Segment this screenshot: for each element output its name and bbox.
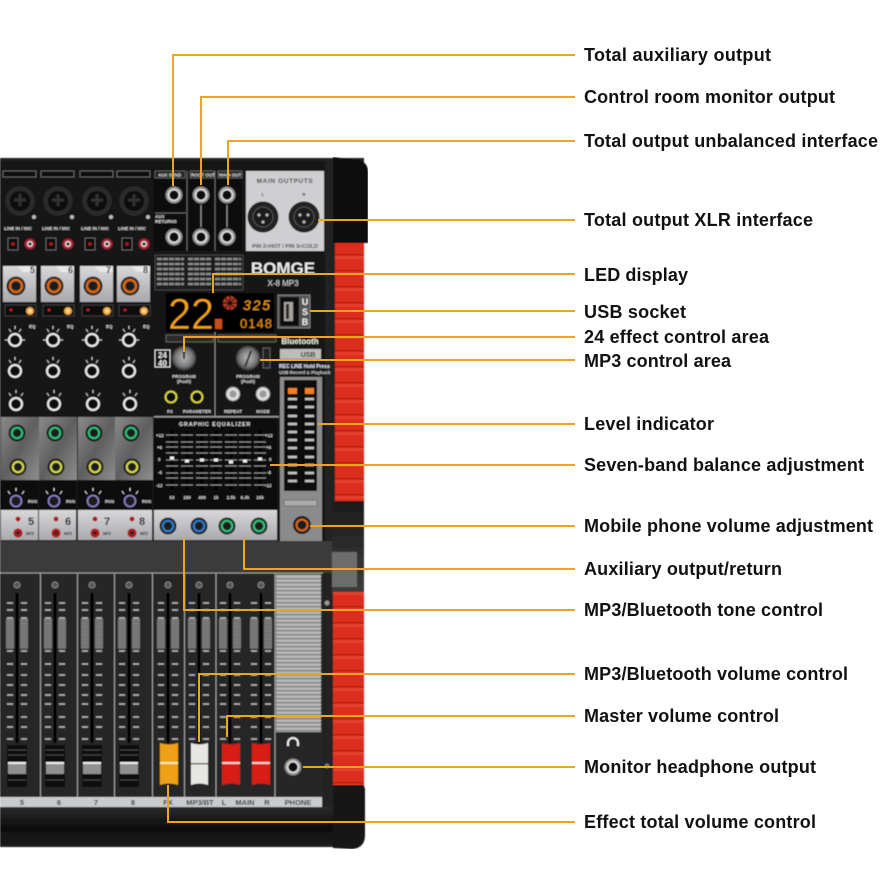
effect control area: PROGRAM xyxy=(172,374,196,379)
label strip: 5 xyxy=(20,798,24,807)
bluetooth and USB labels xyxy=(279,337,331,375)
graphic equalizer: 160 xyxy=(183,495,191,500)
label strip: FX xyxy=(163,798,173,807)
LED display: 22 xyxy=(168,290,214,339)
channel strips xyxy=(1,171,153,540)
bottom front lip xyxy=(0,807,333,847)
brand: X-8 MP3 xyxy=(267,279,299,288)
label: total output unbalanced interface: Total output unbalanced interface xyxy=(584,131,878,151)
graphic equalizer: +12 xyxy=(156,433,164,438)
graphic equalizer: 1k xyxy=(213,495,219,500)
MP3 control area xyxy=(154,335,279,418)
leader lines xyxy=(168,55,575,822)
brand xyxy=(251,259,315,288)
channel text: M/S xyxy=(103,531,111,536)
effect control area: 40 xyxy=(158,359,167,368)
lower band xyxy=(0,541,332,573)
channel text: M/S xyxy=(26,531,34,536)
main L fader cap xyxy=(222,743,240,785)
graphic equalizer: -6 xyxy=(267,470,271,475)
channel text: PAN xyxy=(28,499,37,504)
label strip xyxy=(0,797,322,807)
USB socket xyxy=(278,295,310,328)
graphic equalizer: 16k xyxy=(256,495,264,500)
screws xyxy=(324,600,330,769)
label strip: L xyxy=(222,798,227,807)
channel fader caps xyxy=(7,745,139,787)
LED display xyxy=(166,290,274,339)
tone and aux knobs xyxy=(154,510,277,540)
effects list xyxy=(155,255,243,290)
label strip: 6 xyxy=(57,798,61,807)
channel text: PAN xyxy=(66,499,75,504)
bluetooth and USB labels: USB xyxy=(301,352,315,359)
LED display: 325 xyxy=(243,297,270,313)
channel text xyxy=(4,226,151,536)
FX fader cap xyxy=(160,743,178,785)
label strip: R xyxy=(264,798,270,807)
label strip: 8 xyxy=(131,798,135,807)
main R fader cap xyxy=(252,743,270,785)
channel text: EQ xyxy=(29,324,36,329)
mid cap xyxy=(332,501,364,593)
channel text: 7 xyxy=(106,265,111,275)
graphic equalizer: +12 xyxy=(265,433,273,438)
label: effect total volume control: Effect total volume control xyxy=(584,812,816,832)
effect control area: 24 xyxy=(158,351,167,360)
label: monitor headphone output: Monitor headphone output xyxy=(584,757,816,777)
vent grille xyxy=(276,574,321,732)
label: level indicator: Level indicator xyxy=(584,414,714,434)
graphic equalizer: GRAPHIC EQUALIZER xyxy=(179,422,251,428)
main outputs XLR panel: R xyxy=(302,192,306,197)
output jacks section: AUX SEND xyxy=(158,172,182,178)
label: MP3/Bluetooth volume control: MP3/Bluetooth volume control xyxy=(584,664,848,684)
graphic equalizer: -12 xyxy=(265,483,272,488)
graphic equalizer: 63 xyxy=(169,495,175,500)
graphic equalizer: -6 xyxy=(158,470,162,475)
MP3 control area: REPEAT xyxy=(224,409,242,414)
channel text: LINE IN / MIC xyxy=(118,226,147,231)
output jacks section xyxy=(154,170,242,251)
graphic equalizer: +6 xyxy=(157,445,163,450)
graphic equalizer: 6.3k xyxy=(241,495,250,500)
right silver column with level indicator xyxy=(280,377,322,541)
label: master volume control: Master volume control xyxy=(584,706,779,726)
callout labels xyxy=(584,45,878,832)
bluetooth and USB labels: REC LINE Hold Press xyxy=(279,364,330,370)
label strip: PHONE xyxy=(285,798,311,807)
graphic equalizer xyxy=(154,419,277,509)
MP3 control area: (Push) xyxy=(241,379,256,384)
label: USB socket: USB socket xyxy=(584,302,686,322)
LED display: 0148 xyxy=(240,316,272,331)
graphic equalizer: 0 xyxy=(269,457,272,462)
effect control area: FX xyxy=(167,409,173,414)
main outputs XLR panel: MAIN OUTPUTS xyxy=(257,178,313,185)
label: total output XLR interface: Total output XLR interface xyxy=(584,210,813,230)
top control panel xyxy=(0,161,325,541)
headphone icon xyxy=(288,738,298,746)
label strip: MAIN xyxy=(235,798,255,807)
channel text: M/S xyxy=(64,531,72,536)
channel text: 6 xyxy=(68,265,73,275)
label: MP3/Bluetooth tone control: MP3/Bluetooth tone control xyxy=(584,600,823,620)
main outputs XLR panel: L xyxy=(262,192,265,197)
channel text: LINE IN / MIC xyxy=(81,226,110,231)
MP3/BT fader cap xyxy=(191,743,208,785)
label: MP3 control area: MP3 control area xyxy=(584,351,732,371)
label: 24 effect control area: 24 effect control area xyxy=(584,327,770,347)
output jacks section: ROOT OUT xyxy=(191,172,215,178)
main outputs XLR panel: PIN 2=HOT / PIN 3=COLD xyxy=(252,244,318,250)
output jacks section: AUX xyxy=(155,214,165,219)
label strip: MP3/BT xyxy=(186,798,214,807)
graphic equalizer: 0 xyxy=(158,457,161,462)
MP3 control area: PROGRAM xyxy=(236,374,260,379)
USB socket: U xyxy=(302,297,308,307)
bluetooth and USB labels: USB Record & Playback xyxy=(279,370,331,375)
MP3 control area: MODE xyxy=(256,409,270,414)
label: seven-band balance adjustment: Seven-band balance adjustment xyxy=(584,455,864,475)
USB socket: B xyxy=(302,317,309,327)
channel text: PAN xyxy=(142,499,151,504)
channel text: LINE IN / MIC xyxy=(4,226,33,231)
effect control area xyxy=(155,332,215,416)
bottom cap xyxy=(333,785,365,849)
label: LED display: LED display xyxy=(584,265,688,285)
channel text: 8 xyxy=(139,516,145,528)
red side rail lower xyxy=(333,592,364,785)
grey block under meter xyxy=(332,552,357,587)
channel text: M/S xyxy=(140,531,148,536)
channel text: 5 xyxy=(28,516,34,528)
output jacks section: RETURNS xyxy=(155,219,177,224)
right end cap top xyxy=(333,157,368,243)
channel text: 5 xyxy=(30,265,35,275)
graphic equalizer: +6 xyxy=(266,445,272,450)
label: total auxiliary output: Total auxiliary output xyxy=(584,45,771,65)
red side rail upper xyxy=(335,243,364,501)
label: auxiliary output/return: Auxiliary output/return xyxy=(584,559,782,579)
label: control room monitor output: Control room monitor output xyxy=(584,87,835,107)
graphic equalizer: 400 xyxy=(198,495,206,500)
channel text: 7 xyxy=(104,516,110,528)
channel text: EQ xyxy=(143,324,150,329)
effect control area: (Push) xyxy=(177,379,192,384)
channel text: 6 xyxy=(65,516,71,528)
channel text: PAN xyxy=(105,499,114,504)
label strip: 7 xyxy=(94,798,98,807)
headphone jack xyxy=(284,758,302,776)
channel text: 8 xyxy=(143,265,148,275)
graphic equalizer: 2.5k xyxy=(227,495,236,500)
fader panel xyxy=(0,572,323,807)
output jacks section: MAIN OUT xyxy=(219,172,241,178)
bluetooth and USB labels: Bluetooth xyxy=(281,337,319,346)
channel text: EQ xyxy=(106,324,113,329)
channel text: LINE IN / MIC xyxy=(42,226,71,231)
graphic equalizer: -12 xyxy=(156,483,163,488)
USB socket: S xyxy=(302,307,308,317)
brand: BOMGE xyxy=(251,259,315,278)
label: mobile phone volume adjustment: Mobile phone volume adjustment xyxy=(584,516,873,536)
effect control area: PARAMETER xyxy=(183,409,212,414)
chassis xyxy=(0,158,364,847)
channel text: EQ xyxy=(67,324,74,329)
mixer body xyxy=(0,157,368,849)
main outputs XLR panel xyxy=(246,171,324,251)
